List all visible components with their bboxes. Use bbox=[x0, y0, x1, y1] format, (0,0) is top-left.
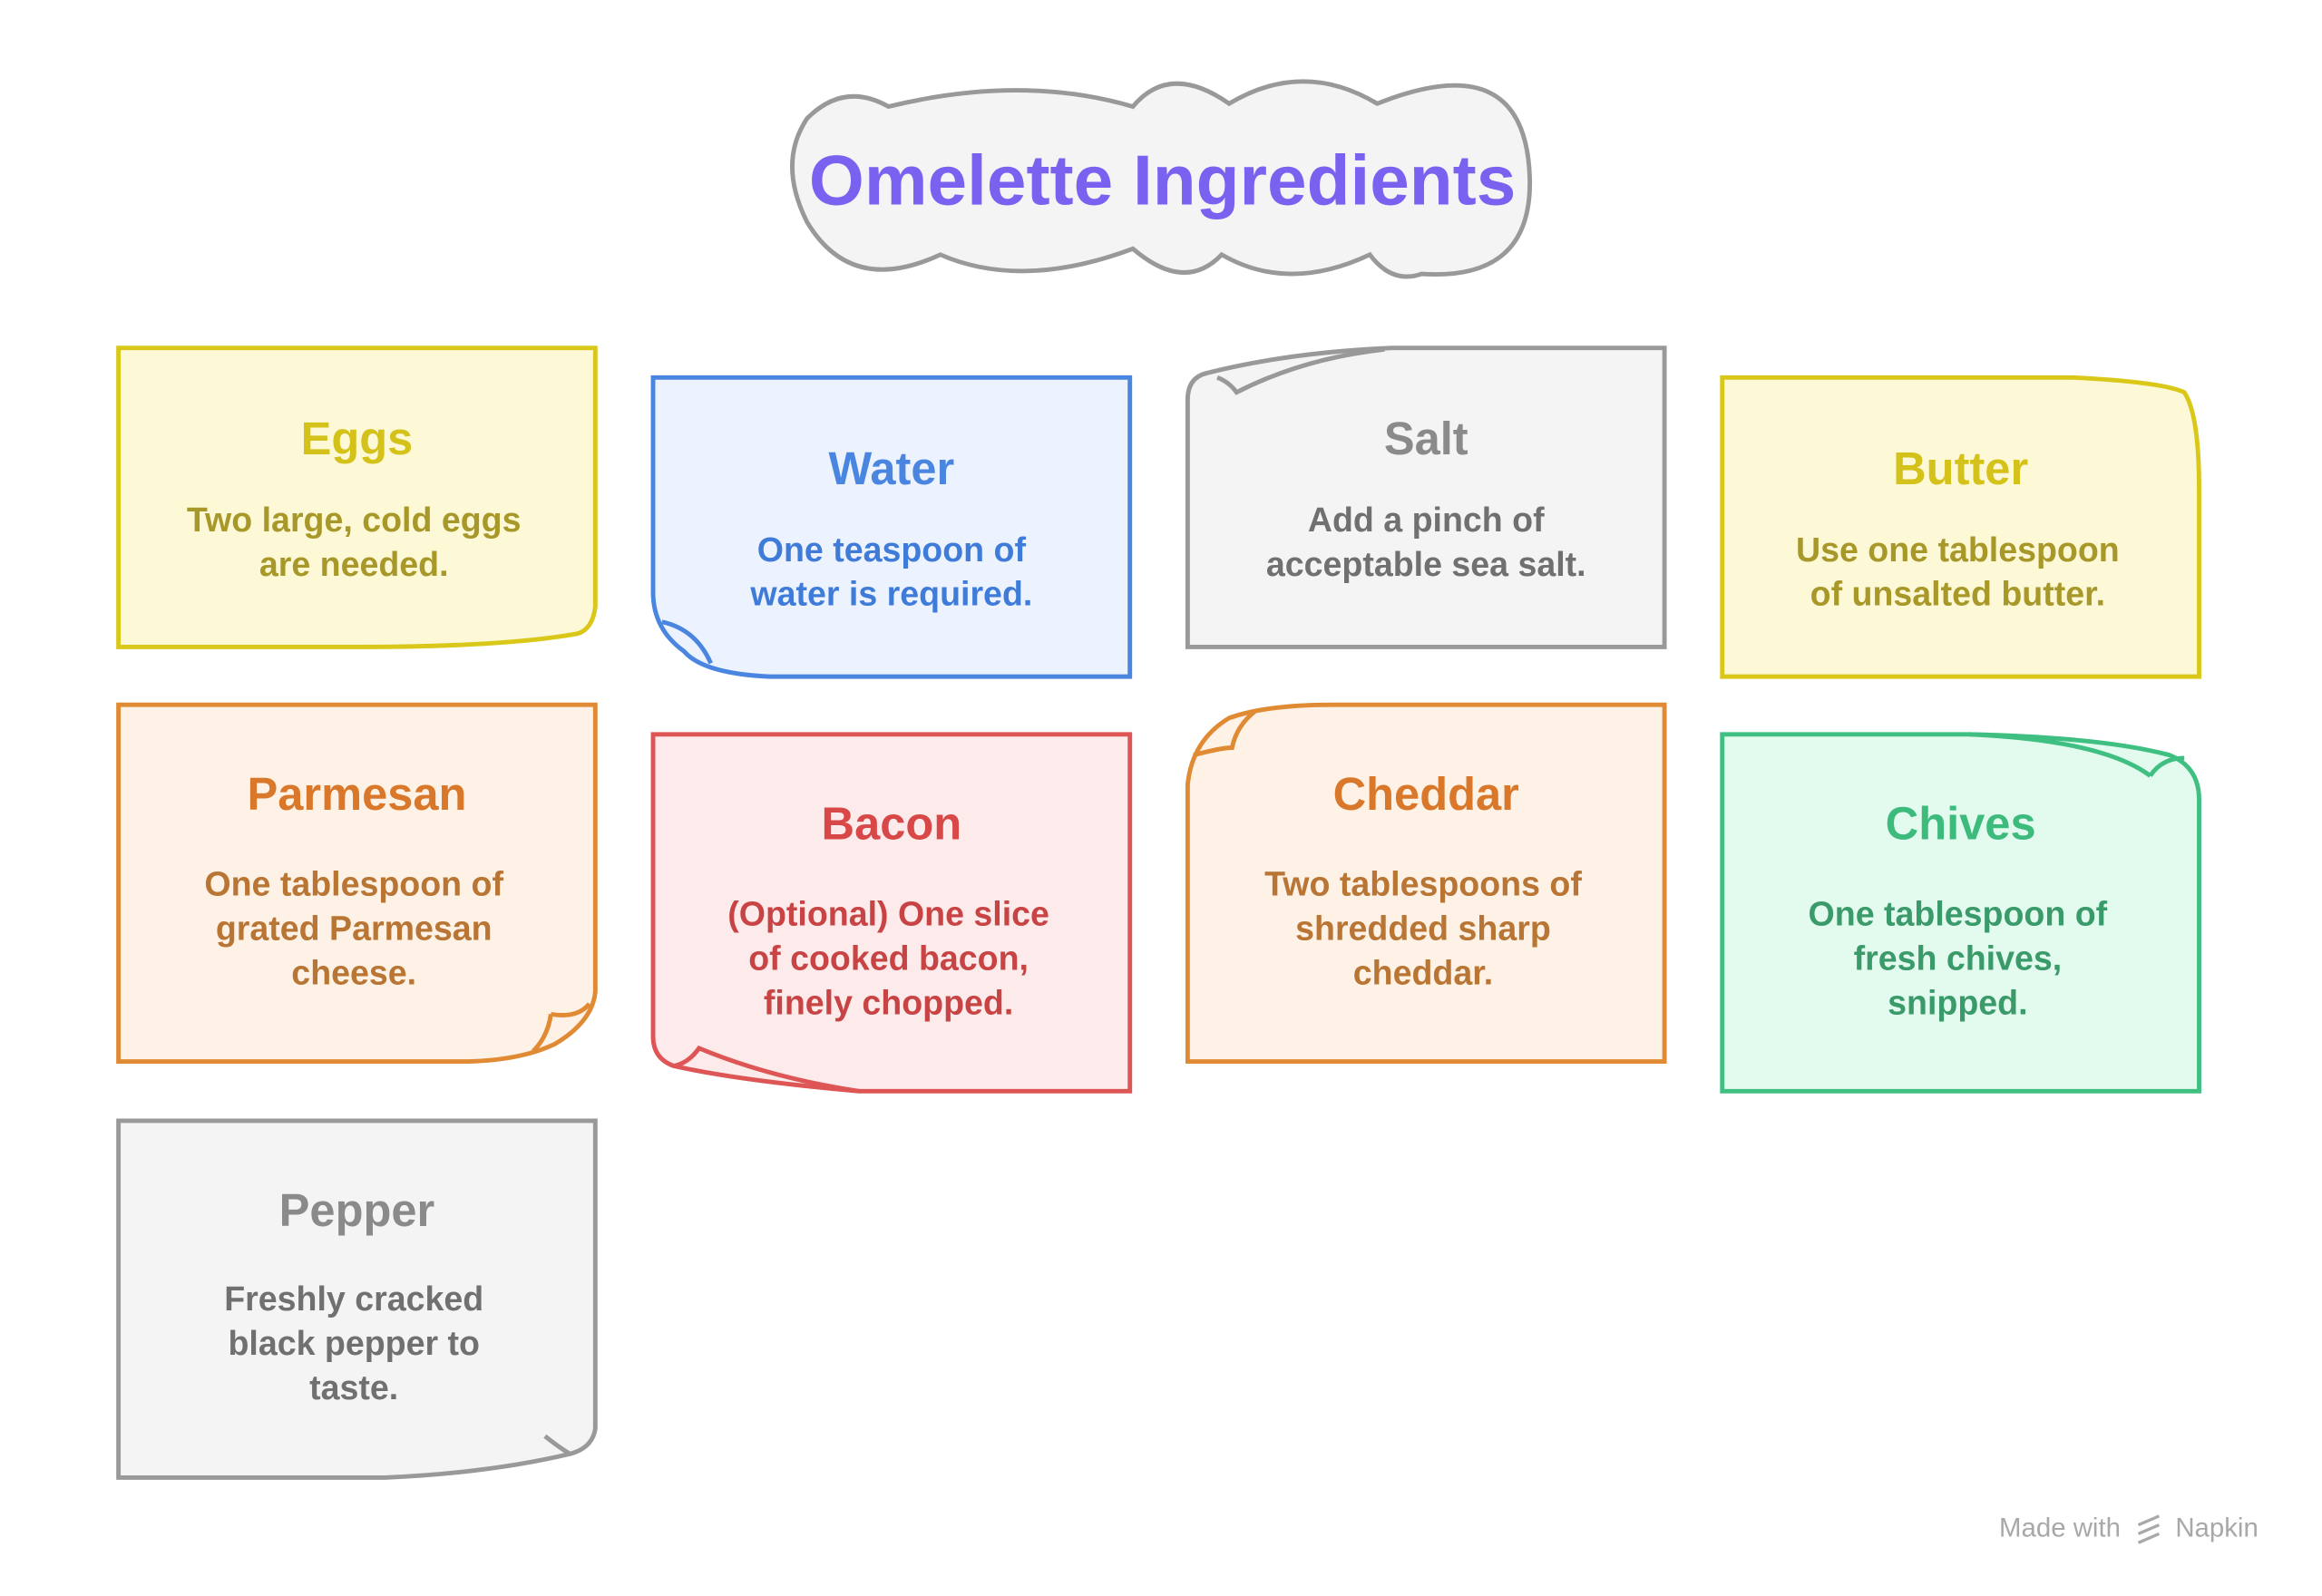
card: parmesan bbox=[119, 705, 595, 1062]
card: pepper: Freshly cracked bbox=[224, 1280, 483, 1318]
card: bacon bbox=[653, 735, 1130, 1091]
card: chives: Chives bbox=[1886, 798, 2036, 850]
card: water: Water bbox=[828, 443, 954, 494]
card: butter: Use one tablespoon bbox=[1796, 530, 2120, 569]
card: water bbox=[653, 377, 1130, 676]
card: bacon: (Optional) One slice bbox=[727, 894, 1049, 932]
card: butter: Butter bbox=[1893, 443, 2028, 494]
card: eggs: Two large, cold eggs bbox=[187, 501, 521, 539]
card: chives: fresh chives, bbox=[1854, 939, 2062, 977]
card: eggs: are needed. bbox=[259, 545, 449, 583]
card: chives: One tablespoon of bbox=[1809, 894, 2108, 932]
card: pepper bbox=[119, 1121, 595, 1477]
card: parmesan: cheese. bbox=[291, 954, 416, 992]
footer: made with napkin bbox=[1999, 1513, 2259, 1543]
card: parmesan: One tablespoon of bbox=[204, 865, 503, 903]
card: water: One teaspoon of bbox=[757, 530, 1026, 569]
card: salt: Add a pinch of bbox=[1308, 501, 1545, 539]
card: butter: of unsalted butter. bbox=[1810, 575, 2105, 613]
card: salt: Salt bbox=[1384, 413, 1468, 464]
card: pepper: Pepper bbox=[279, 1184, 434, 1236]
card: parmesan: grated Parmesan bbox=[216, 910, 493, 948]
card: cheddar: shredded sharp bbox=[1295, 910, 1551, 948]
card: eggs: Eggs bbox=[301, 413, 413, 464]
card: water: water is required. bbox=[749, 575, 1032, 613]
card: cheddar: Cheddar bbox=[1333, 768, 1519, 820]
card: cheddar: cheddar. bbox=[1353, 954, 1493, 992]
card: parmesan: Parmesan bbox=[247, 768, 466, 820]
card: bacon: Bacon bbox=[822, 798, 961, 850]
title: Omelette Ingredients bbox=[809, 140, 1516, 219]
card: salt: acceptable sea salt. bbox=[1266, 545, 1586, 583]
card: eggs bbox=[119, 348, 595, 647]
card: bacon: of cooked bacon, bbox=[748, 939, 1029, 977]
card: chives: snipped. bbox=[1888, 983, 2028, 1021]
card: pepper: taste. bbox=[309, 1368, 398, 1406]
footer: made with napkin: Made with bbox=[1999, 1513, 2121, 1543]
card: cheddar: Two tablespoons of bbox=[1264, 865, 1582, 903]
card: salt bbox=[1187, 348, 1664, 647]
card: cheddar bbox=[1187, 705, 1664, 1062]
card: pepper: black pepper to bbox=[228, 1324, 480, 1362]
title cloud bbox=[792, 82, 1530, 277]
card: butter bbox=[1722, 377, 2199, 676]
footer: made with napkin: Napkin bbox=[2175, 1513, 2259, 1543]
card: chives bbox=[1722, 735, 2199, 1091]
card: bacon: finely chopped. bbox=[764, 983, 1013, 1021]
